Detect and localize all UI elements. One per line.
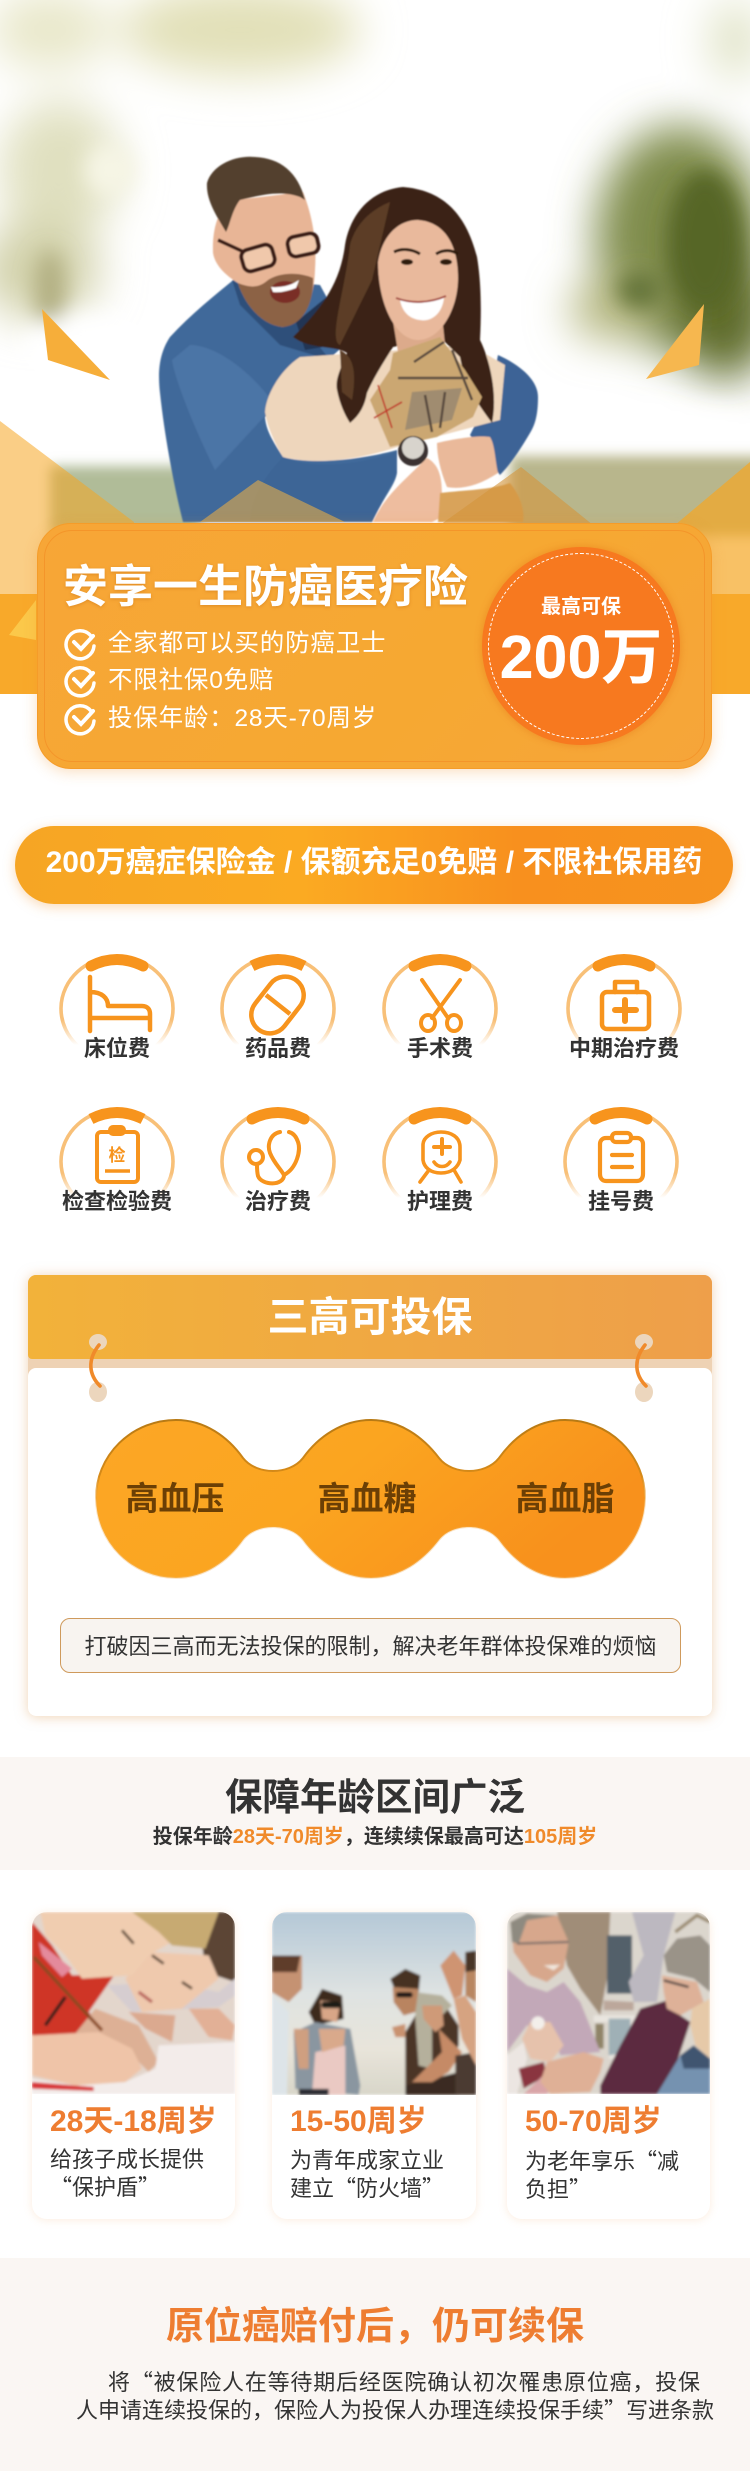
bullet 2 — [64, 666, 274, 698]
panel body — [28, 1368, 712, 1716]
card: seniors — [507, 1912, 710, 2219]
headline pill: 200万癌症保险金 / 保额充足0免赔 / 不限社保用药 — [46, 846, 702, 879]
hero photo: couple hugging — [0, 0, 750, 594]
section paragraph: 将“被保险人在等待期后经医院确认初次罹患原位癌，投保 — [108, 2365, 701, 2397]
icon: test report — [61, 1110, 173, 1198]
description: 建立“防火墙” — [290, 2171, 444, 2203]
description: 负担” — [525, 2172, 591, 2204]
coverage icons grid — [59, 954, 682, 1196]
label: drug fee: 药品费 — [245, 1036, 311, 1061]
label: surgery fee: 手术费 — [407, 1036, 473, 1061]
badge amount: 200万 — [500, 623, 662, 691]
label: hypertension: 高血压 — [126, 1480, 224, 1517]
three linked circles — [95, 1419, 646, 1579]
photo: friends outdoors — [272, 1912, 476, 2095]
inner border — [44, 530, 705, 762]
man head — [213, 192, 315, 327]
age range: 50-70周岁 — [525, 2105, 662, 2138]
binder rings — [89, 1334, 653, 1402]
bullet list — [64, 629, 386, 736]
note box: 打破因三高而无法投保的限制，解决老年群体投保难的烦恼 — [84, 1634, 656, 1659]
icon: medical kit — [568, 957, 680, 1045]
label: bed fee: 床位费 — [84, 1036, 150, 1061]
section subtitle: 投保年龄28天-70周岁，连续续保最高可达105周岁 — [153, 1826, 597, 1848]
sleeve lower — [438, 483, 523, 522]
watch — [398, 436, 428, 466]
age section band — [0, 1757, 750, 1870]
description — [525, 2144, 679, 2204]
orange background band — [0, 594, 750, 694]
translucent triangles — [0, 421, 134, 600]
age range: 28天-18周岁 — [50, 2105, 217, 2138]
woman coat — [265, 345, 505, 461]
badge caption: 最高可保 — [541, 596, 621, 618]
bullet 3: 投保年龄：28天-70周岁 — [108, 705, 377, 732]
panel: three highs — [28, 1275, 712, 1716]
bottom section band — [0, 2258, 750, 2471]
description: 给孩子成长提供 — [50, 2147, 204, 2172]
label: hyperlipidemia: 高血脂 — [516, 1480, 614, 1517]
section paragraph — [76, 2365, 714, 2425]
photo: children drawing — [32, 1912, 235, 2094]
bullet 2: 不限社保0免赔 — [108, 667, 274, 694]
decorative triangles — [9, 304, 704, 640]
label: mid-term treatment fee: 中期治疗费 — [569, 1036, 679, 1061]
card title: 安享一生防癌医疗险 — [63, 561, 468, 612]
description: 为老年享乐“减 — [525, 2144, 679, 2176]
icon: capsule — [222, 957, 334, 1045]
card: young adults — [272, 1912, 476, 2219]
woman neck and face — [392, 323, 446, 352]
man body — [159, 277, 397, 522]
label: treatment fee: 治疗费 — [245, 1189, 311, 1214]
panel header: 三高可投保 — [268, 1294, 472, 1340]
icon: bed — [61, 957, 173, 1045]
panel header — [28, 1275, 712, 1359]
product card — [37, 523, 712, 769]
section title: 原位癌赔付后，仍可续保 — [166, 2306, 584, 2348]
woman hair — [293, 187, 494, 423]
label: exam fee: 检查检验费 — [62, 1189, 172, 1214]
icon: test report: 检 — [108, 1145, 126, 1165]
label: registration fee: 挂号费 — [588, 1189, 654, 1214]
description: 为青年成家立业 — [290, 2148, 444, 2173]
headline pill — [15, 826, 733, 904]
icon: scissors — [384, 957, 496, 1045]
icon: registration clipboard — [565, 1110, 677, 1198]
note box — [60, 1618, 681, 1673]
bullet 1: 全家都可以买的防癌卫士 — [108, 630, 386, 657]
coverage badge — [482, 547, 680, 745]
section paragraph: 人申请连续投保的，保险人为投保人办理连续投保手续”写进条款 — [76, 2393, 714, 2425]
age range: 15-50周岁 — [290, 2105, 427, 2138]
description — [290, 2148, 444, 2203]
section title: 保障年龄区间广泛 — [225, 1776, 525, 1818]
label: hyperglycemia: 高血糖 — [318, 1480, 416, 1517]
description — [50, 2147, 204, 2202]
description: “保护盾” — [50, 2170, 160, 2202]
scarf — [370, 337, 482, 447]
label: nursing fee: 护理费 — [407, 1189, 473, 1214]
card: children — [32, 1912, 235, 2219]
hands — [437, 437, 498, 488]
photo: grandparents with baby — [507, 1912, 710, 2094]
icon: stethoscope — [222, 1110, 334, 1198]
icon: nurse — [384, 1110, 496, 1198]
